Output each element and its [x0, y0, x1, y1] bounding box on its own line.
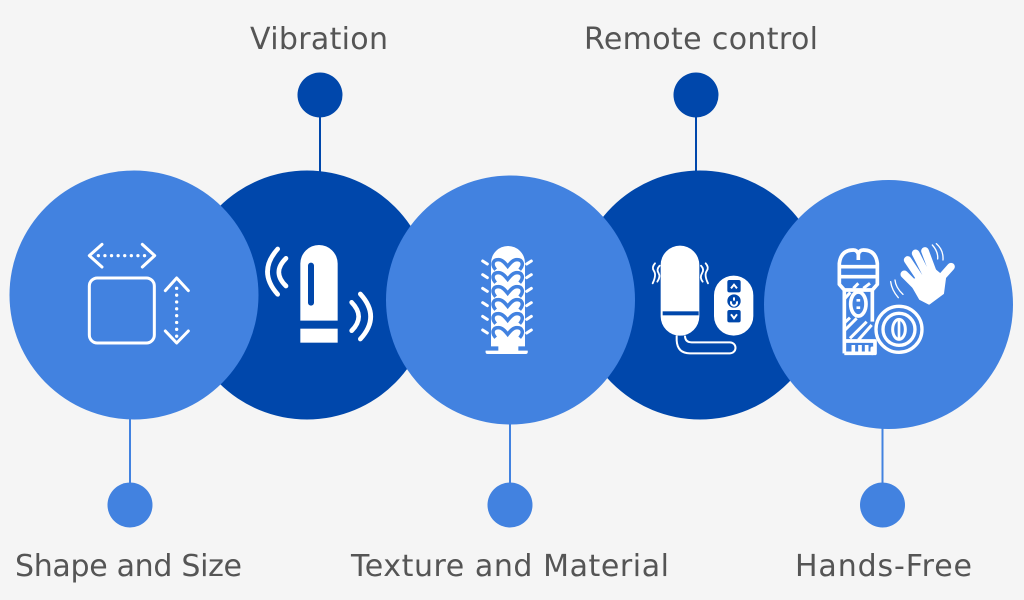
- icon: vibrating device: [267, 245, 371, 343]
- waving hand: [891, 244, 951, 304]
- label: Texture and Material: Texture and Material: [350, 549, 669, 584]
- icon: textured sleeve: [483, 246, 531, 354]
- connector: Texture and Material: [488, 420, 532, 528]
- circle: Vibration: [182, 170, 432, 420]
- connector: Hands-Free: [860, 425, 905, 528]
- circle: Texture and Material: [386, 176, 635, 424]
- circle: Shape and Size: [10, 170, 258, 420]
- connector: Remote control: [674, 72, 718, 175]
- icon: remote-controlled bullet: [653, 246, 753, 353]
- connector: Shape and Size: [108, 415, 152, 528]
- label: Hands-Free: Hands-Free: [795, 549, 972, 584]
- icon: hands-free stroker and waving hand: [839, 244, 951, 353]
- circle: Hands-Free: [764, 180, 1013, 429]
- label: Shape and Size: Shape and Size: [15, 549, 242, 584]
- circle: Remote control: [576, 170, 824, 420]
- coin-shaped insert: [876, 306, 922, 352]
- connector: Vibration: [298, 72, 342, 175]
- label: Remote control: Remote control: [584, 22, 818, 57]
- icon: shape and size arrows: [89, 244, 188, 343]
- label: Vibration: Vibration: [250, 22, 388, 57]
